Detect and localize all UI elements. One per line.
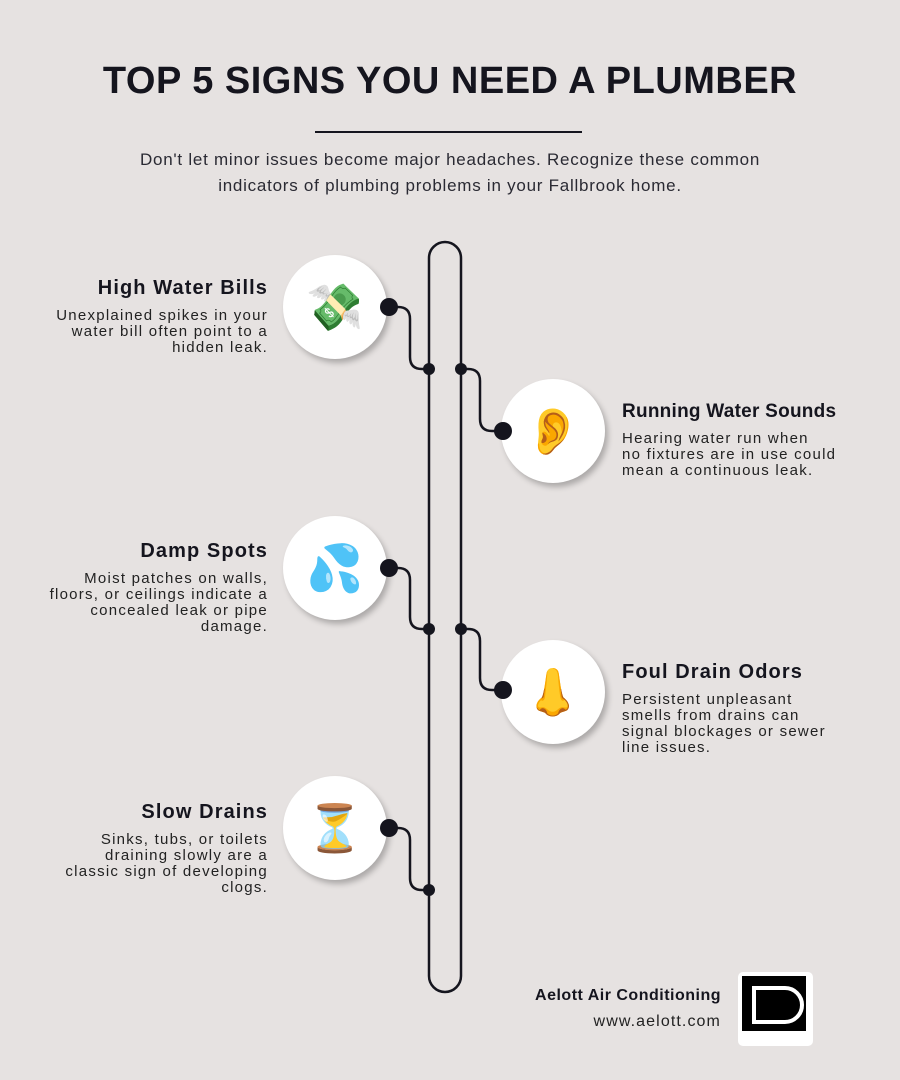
text: foul drain odors: line issues. [622,739,711,756]
logo [738,972,813,1046]
text: slow drains [65,801,268,896]
text: running water sounds: no fixtures are in use could [622,446,836,463]
text: high water bills: Unexplained spikes in your [56,307,268,324]
subtitle [140,150,760,195]
icon: hourglass: ⏳ [306,800,364,854]
text: slow drains: clogs. [221,879,268,896]
text: damp spots: floors, or ceilings indicate a [50,586,268,603]
text: damp spots: damage. [201,618,268,635]
footer brand: www.aelott.com [594,1013,721,1030]
text: foul drain odors [622,661,826,756]
subtitle: indicators of plumbing problems in your Fallbrook home. [218,176,682,195]
text: high water bills: hidden leak. [172,339,268,356]
icon: money [283,255,387,359]
icon: nose: 👃 [524,664,582,718]
icon: droplets [283,516,387,620]
text: damp spots: Damp Spots [140,540,268,562]
text: foul drain odors: signal blockages or sewer [622,723,826,740]
text: running water sounds: mean a continuous leak. [622,462,813,479]
footer brand [535,987,721,1030]
icon: money: 💸 [306,280,364,334]
text: damp spots: Moist patches on walls, [84,570,268,587]
icon: droplets: 💦 [306,540,364,594]
text: running water sounds: Hearing water run when [622,430,809,447]
icon: hourglass [283,776,387,880]
text: slow drains: draining slowly are a [105,847,268,864]
text: damp spots: concealed leak or pipe [90,602,268,619]
text: running water sounds [622,401,836,479]
text: slow drains: Slow Drains [141,801,268,823]
text: slow drains: Sinks, tubs, or toilets [101,831,268,848]
text: foul drain odors: Foul Drain Odors [622,661,803,683]
icon: ear: 👂 [524,404,582,458]
title: TOP 5 SIGNS YOU NEED A PLUMBER [103,60,797,102]
text: high water bills: water bill often point to a [72,323,268,340]
text: foul drain odors: Persistent unpleasant [622,691,793,708]
text: damp spots [50,540,268,635]
text: slow drains: classic sign of developing [65,863,268,880]
text: foul drain odors: smells from drains can [622,707,800,724]
text: high water bills: High Water Bills [98,277,268,299]
icon: ear [501,379,605,483]
text: running water sounds: Running Water Sounds [622,401,836,422]
text: high water bills [56,277,268,356]
icon: nose [501,640,605,744]
subtitle: Don't let minor issues become major headaches. Recognize these common [140,150,760,169]
footer brand: Aelott Air Conditioning [535,987,721,1004]
